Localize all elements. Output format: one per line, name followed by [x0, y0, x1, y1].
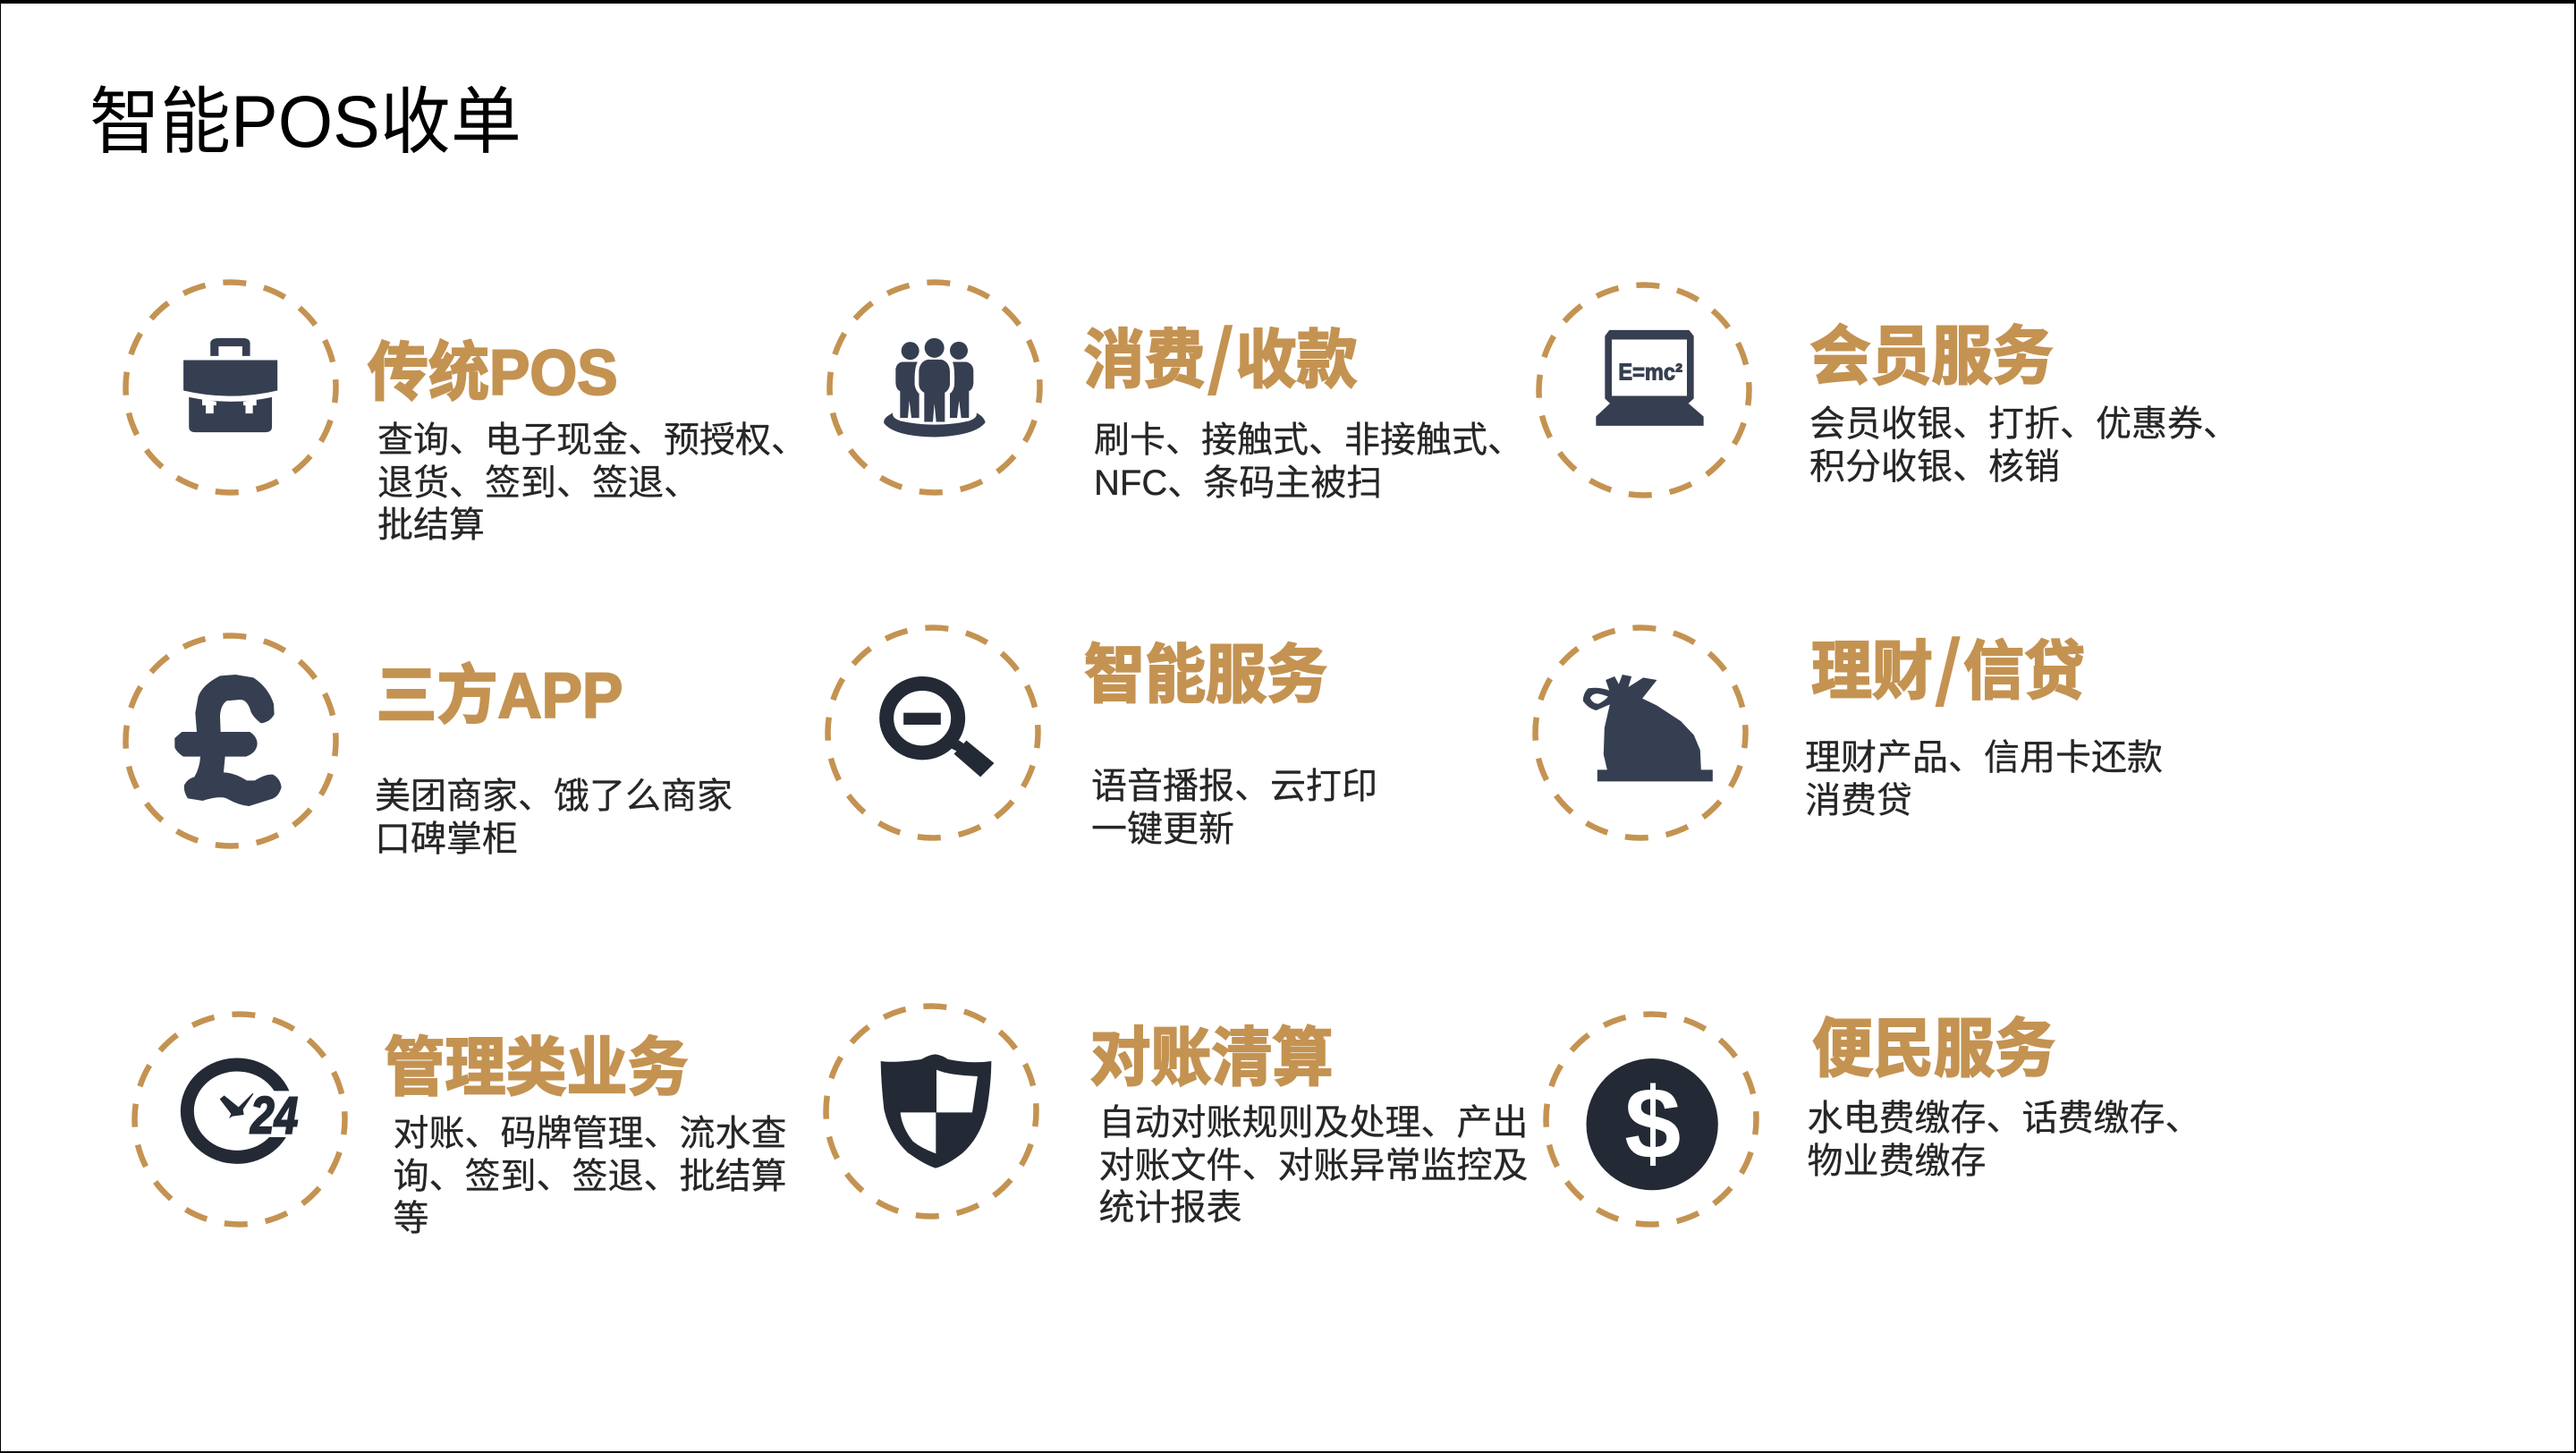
heading: / — [1936, 614, 1961, 714]
panel: 消费/收款 — [826, 279, 1523, 503]
icon: pound sign in dashed circle — [123, 633, 339, 849]
description — [1805, 738, 2163, 820]
description: 语音播报、云打印 — [1091, 767, 1377, 806]
icon: 24 hour clock in dashed circle: 24 — [250, 1087, 298, 1145]
icon: group of people in dashed circle — [826, 279, 1043, 496]
description: 批结算 — [377, 506, 485, 545]
panel: 便民服务 — [1543, 1011, 2200, 1228]
panel: 管理类业务 — [131, 1011, 787, 1238]
description — [1094, 421, 1523, 503]
description: 自动对账规则及处理、产出 — [1098, 1103, 1528, 1143]
heading: 管理类业务 — [385, 1032, 689, 1104]
panel: 理财/信贷 — [1532, 614, 2163, 841]
description: 口碑掌柜 — [375, 820, 518, 859]
panel: 对账清算 — [823, 1003, 1528, 1228]
icon: shield in dashed circle — [823, 1003, 1039, 1219]
description: 对账文件、对账异常监控及 — [1098, 1146, 1528, 1185]
panel: 三方APP — [123, 633, 733, 859]
description: 询、签到、签退、批结算 — [394, 1157, 787, 1196]
panel: 智能服务 — [825, 625, 1377, 849]
description — [1098, 1103, 1528, 1228]
description: 统计报表 — [1098, 1188, 1241, 1228]
icon: magnifier in dashed circle — [825, 625, 1041, 841]
description — [1807, 1099, 2200, 1181]
description — [377, 421, 807, 545]
description: 物业费缴存 — [1807, 1142, 1986, 1181]
panel: 传统POS — [123, 279, 807, 545]
title: 智能POS收单 — [89, 81, 521, 162]
description: 退货、签到、签退、 — [377, 463, 699, 503]
description — [394, 1114, 787, 1238]
description: 一键更新 — [1091, 810, 1234, 849]
heading: 消费 收款 — [1084, 325, 1358, 396]
heading: 对账清算 — [1089, 1023, 1334, 1094]
description — [375, 777, 733, 859]
heading: 三方APP — [376, 660, 623, 731]
heading: 智能服务 — [1084, 640, 1327, 711]
heading: 理财 信贷 — [1811, 636, 2085, 708]
heading: 会员服务 — [1810, 321, 2054, 393]
description: 消费贷 — [1805, 781, 1912, 820]
icon: briefcase in dashed circle — [123, 279, 339, 496]
description — [1091, 767, 1377, 849]
description: 等 — [394, 1199, 429, 1238]
description: 理财产品、信用卡还款 — [1805, 738, 2163, 777]
description — [1809, 404, 2239, 487]
icon: dollar coin in dashed circle — [1543, 1011, 1759, 1228]
description: NFC、条码主被扫 — [1094, 463, 1382, 503]
panel: 会员服务 — [1536, 282, 2239, 498]
description: 对账、码牌管理、流水查 — [394, 1114, 787, 1153]
heading: / — [1208, 302, 1233, 403]
description: 查询、电子现金、预授权、 — [377, 421, 807, 460]
icon: laptop in dashed circle — [1536, 282, 1752, 498]
description: 美团商家、饿了么商家 — [375, 777, 733, 816]
icon: dollar coin in dashed circle: $ — [1624, 1067, 1681, 1181]
heading: 便民服务 — [1812, 1014, 2055, 1085]
heading: 传统POS — [368, 337, 618, 409]
description: 水电费缴存、话费缴存、 — [1807, 1099, 2200, 1138]
description: 刷卡、接触式、非接触式、 — [1094, 421, 1523, 460]
icon: money bag in dashed circle — [1532, 625, 1749, 841]
description: 会员收银、打折、优惠券、 — [1809, 404, 2239, 444]
description: 积分收银、核销 — [1809, 447, 2060, 487]
icon: laptop in dashed circle: E=mc² — [1618, 358, 1682, 385]
icon: 24 hour clock in dashed circle — [131, 1011, 348, 1228]
